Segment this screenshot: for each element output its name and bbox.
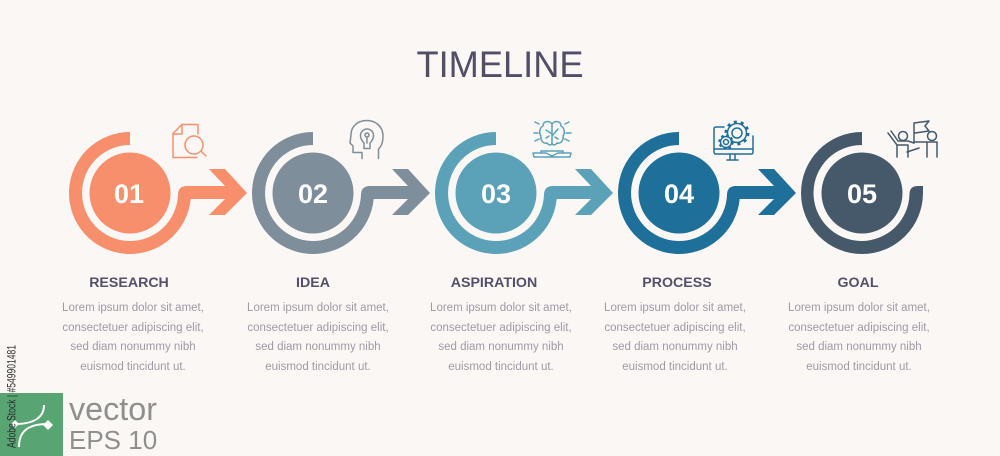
heading 01: RESEARCH: [89, 275, 169, 291]
step 01: research: [62, 124, 247, 373]
text block 03: Lorem ipsum dolor sit amet,: [430, 302, 572, 314]
number disc 04: [638, 152, 720, 234]
step 03: aspiration: [430, 122, 613, 373]
number disc 05: 05: [847, 179, 877, 209]
text block 03: sed diam nonummy nibh: [438, 341, 564, 353]
text block 03: [430, 302, 572, 373]
text block 03: consectetuer adipiscing elit,: [430, 322, 572, 334]
ring 05: [801, 132, 923, 254]
text block 02: consectetuer adipiscing elit,: [247, 322, 389, 334]
text block 01: consectetuer adipiscing elit,: [62, 322, 204, 334]
text block 05: sed diam nonummy nibh: [796, 341, 922, 353]
text block 01: Lorem ipsum dolor sit amet,: [62, 302, 204, 314]
step 02: idea: [247, 120, 430, 373]
number disc 02: 02: [298, 179, 328, 209]
text block 04: sed diam nonummy nibh: [612, 341, 738, 353]
vector label: vector: [69, 391, 157, 427]
vector badge: [0, 391, 157, 456]
icon: brain on book: [533, 122, 571, 157]
icon: team with flag: [888, 121, 937, 157]
heading 02: IDEA: [296, 275, 330, 291]
ring with arrow 01: [69, 132, 247, 254]
step 05: goal: [788, 121, 937, 373]
number disc 03: [456, 152, 536, 234]
text block 02: euismod tincidunt ut.: [265, 361, 371, 373]
ring with arrow 04: [618, 132, 796, 254]
number disc 02: [272, 152, 354, 234]
text block 04: [604, 302, 746, 373]
text block 02: [247, 302, 389, 373]
heading 03: ASPIRATION: [451, 275, 537, 291]
text block 01: euismod tincidunt ut.: [80, 361, 186, 373]
number disc 03: 03: [481, 179, 511, 209]
icon: green bezier square: [0, 393, 63, 456]
text block 02: Lorem ipsum dolor sit amet,: [247, 302, 389, 314]
text block 05: Lorem ipsum dolor sit amet,: [788, 302, 930, 314]
stock id vertical text: Adobe Stock | #549901481: [4, 345, 18, 448]
text block 05: consectetuer adipiscing elit,: [788, 322, 930, 334]
text block 01: sed diam nonummy nibh: [70, 341, 196, 353]
text block 05: [788, 302, 930, 373]
text block 02: sed diam nonummy nibh: [255, 341, 381, 353]
number disc 05: [822, 152, 902, 234]
text block 04: Lorem ipsum dolor sit amet,: [604, 302, 746, 314]
heading 05: GOAL: [838, 275, 879, 291]
title: TIMELINE: [416, 44, 584, 85]
heading 04: PROCESS: [642, 275, 712, 291]
number disc 01: 01: [114, 179, 144, 209]
text block 03: euismod tincidunt ut.: [448, 361, 554, 373]
icon: head with lightbulb: [350, 120, 383, 158]
number disc 01: [90, 152, 170, 234]
icon: monitor with gears: [714, 122, 753, 160]
text block 04: euismod tincidunt ut.: [622, 361, 728, 373]
EPS label: EPS 10: [69, 425, 157, 455]
icon: document search: [173, 124, 206, 158]
ring with arrow 02: [252, 132, 430, 254]
ring with arrow 03: [435, 132, 613, 254]
text block 04: consectetuer adipiscing elit,: [604, 322, 746, 334]
text block 01: [62, 302, 204, 373]
number disc 04: 04: [664, 179, 694, 209]
step 04: process: [604, 122, 796, 373]
text block 05: euismod tincidunt ut.: [806, 361, 912, 373]
